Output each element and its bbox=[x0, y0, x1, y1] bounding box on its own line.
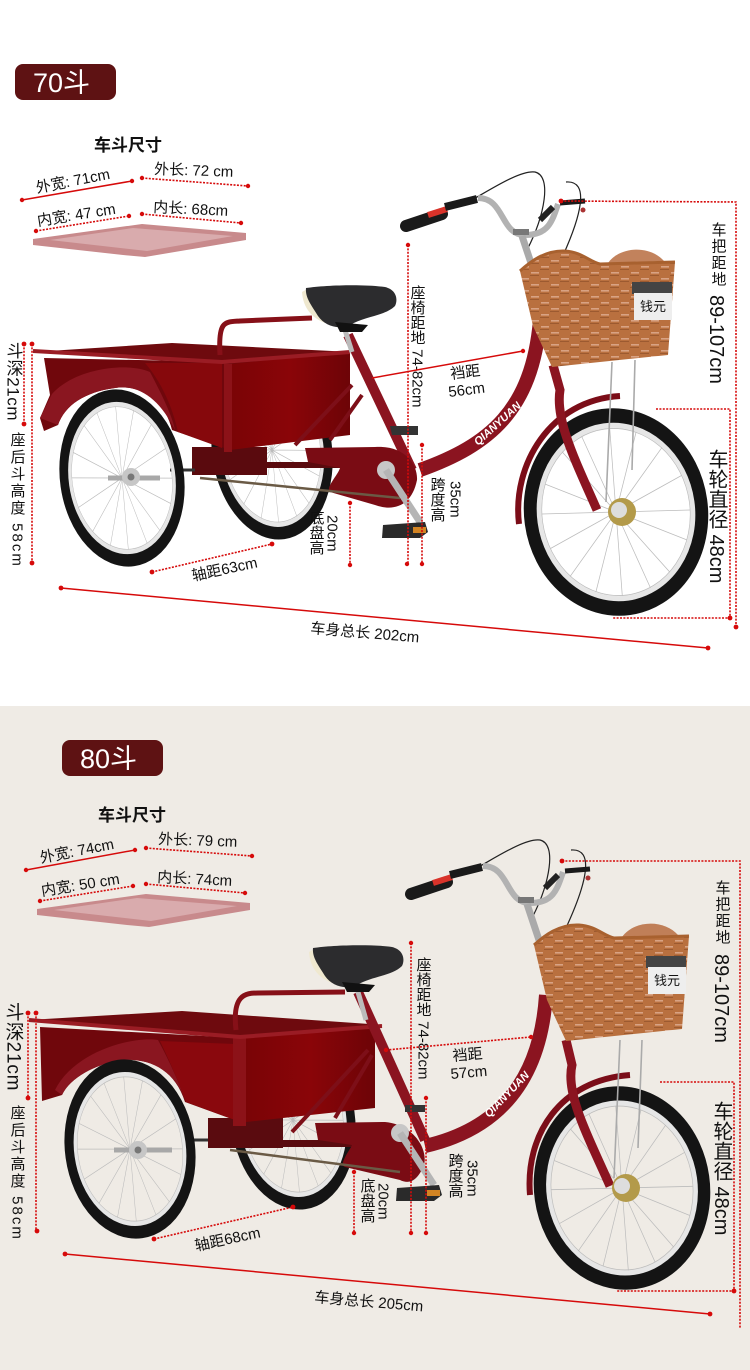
dimension: bed depth 21cm: 斗深21cm bbox=[4, 342, 23, 421]
dimension: step-over height 35cm: 35cm bbox=[446, 481, 464, 518]
dimension: handlebar height 89-107cm: 车把距地 bbox=[714, 880, 730, 946]
cargo tray diagram bbox=[37, 894, 250, 927]
dimension: seat height 74-82cm bbox=[405, 243, 426, 566]
dimension: wheel diameter 48cm bbox=[612, 409, 732, 620]
dimension: overall length 202cm bbox=[59, 586, 710, 650]
dimension: rear bed height 58cm bbox=[8, 1011, 39, 1241]
dimension: handlebar height 89-107cm bbox=[559, 199, 738, 629]
dimension: inner width 50cm: 内宽: 50 cm bbox=[40, 871, 121, 900]
frame: 70斗 bbox=[200, 320, 540, 508]
dimension: rear bed height 58cm: 座后斗高度 58cm bbox=[8, 432, 26, 568]
dimension: wheelbase 63cm: 轴距63cm bbox=[190, 554, 259, 585]
dimension: outer length 79cm bbox=[144, 831, 254, 858]
dimension: overall length 205cm bbox=[63, 1252, 712, 1316]
saddle: 70斗 bbox=[302, 285, 396, 332]
dimension: inner length 68cm bbox=[140, 199, 243, 225]
dimension: chassis height 20cm: 20cm bbox=[324, 515, 340, 552]
dimension: outer width 71cm bbox=[20, 166, 134, 202]
dimension: inner width 47cm: 内宽: 47 cm bbox=[36, 201, 117, 230]
dimension: chassis height 20cm: 底盘高 bbox=[308, 510, 324, 555]
white background panel: 70斗 bbox=[0, 0, 750, 706]
dimension: handlebar height 89-107cm: 车把距地 bbox=[710, 222, 726, 288]
front fender and wheel: 80斗 bbox=[528, 1040, 716, 1293]
80斗 badge bbox=[62, 740, 163, 776]
dimension: wheel diameter 48cm: 车轮直径 48cm bbox=[710, 1101, 733, 1235]
cargo box: 70斗 bbox=[33, 318, 352, 475]
dimension: crotch distance 57cm: 57cm bbox=[450, 1063, 488, 1083]
dimension: step-over height 35cm: 跨度高 bbox=[446, 1153, 464, 1198]
80斗 badge: 80斗 bbox=[80, 744, 137, 774]
dimension: inner length 74cm bbox=[144, 869, 247, 895]
70斗 badge bbox=[15, 64, 116, 100]
front fender and wheel: 70斗 bbox=[518, 360, 714, 620]
dimension: handlebar height 89-107cm: 89-107cm bbox=[710, 954, 732, 1043]
dimension: handlebar height 89-107cm: 89-107cm bbox=[705, 295, 727, 384]
dimension: chassis height 20cm: 20cm bbox=[374, 1183, 392, 1220]
dimension: seat height 74-82cm: 座椅距地 74-82cm bbox=[414, 957, 432, 1080]
dimension: crotch distance 56cm bbox=[372, 349, 525, 401]
dimension: step-over height 35cm: 跨度高 bbox=[428, 477, 446, 522]
basket: 70斗 bbox=[520, 250, 675, 367]
dimension: inner length 74cm: 内长: 74cm bbox=[157, 869, 233, 890]
dimension: step-over height 35cm: 35cm bbox=[464, 1160, 480, 1197]
dimension: chassis height 20cm bbox=[308, 501, 352, 567]
dimension: crotch distance 57cm: 裆距 bbox=[452, 1045, 483, 1065]
heading: 车斗尺寸: 车斗尺寸 bbox=[98, 805, 166, 825]
dimension: outer width 74cm bbox=[24, 836, 137, 872]
crank and pedal: 70斗 bbox=[377, 461, 428, 538]
dimension: crotch distance 56cm: 裆距 bbox=[449, 362, 481, 383]
dimension: bed depth 21cm bbox=[2, 1002, 30, 1100]
dimension: crotch distance 56cm: 56cm bbox=[447, 380, 486, 401]
basket: 80斗 bbox=[534, 924, 689, 1041]
rear wheel front: 80斗 bbox=[58, 1058, 208, 1240]
dimension: rear bed height 58cm: 座后斗高度 58cm bbox=[8, 1105, 26, 1241]
dimension: rear bed height 58cm bbox=[8, 342, 34, 568]
heading: 车斗尺寸: 车斗尺寸 bbox=[94, 135, 162, 155]
rear wheel front: 70斗 bbox=[53, 388, 195, 568]
dimension: handlebar height 89-107cm bbox=[560, 859, 740, 1328]
dimension: crotch distance 57cm bbox=[384, 1035, 533, 1083]
dimension: wheel diameter 48cm bbox=[616, 1082, 736, 1293]
dimension: wheelbase 68cm: 轴距68cm bbox=[193, 1224, 262, 1255]
dimension: bed depth 21cm: 斗深21cm bbox=[2, 1002, 24, 1091]
crank and pedal: 80斗 bbox=[391, 1124, 442, 1201]
dimension: seat height 74-82cm: 座椅距地 74-82cm bbox=[408, 285, 426, 408]
dimension: inner length 68cm: 内长: 68cm bbox=[153, 199, 229, 220]
dimension: overall length 205cm: 车身总长 205cm bbox=[314, 1289, 424, 1316]
70斗 badge: 70斗 bbox=[33, 68, 90, 98]
dimension: overall length 202cm: 车身总长 202cm bbox=[310, 620, 420, 647]
brand on frame: 70斗: QIANYUAN bbox=[472, 399, 524, 448]
frame: 80斗 bbox=[230, 985, 546, 1182]
cargo box: 80斗 bbox=[28, 992, 383, 1148]
cargo tray diagram bbox=[33, 224, 246, 257]
beige background panel: 80斗 bbox=[0, 706, 750, 1370]
dimension: chassis height 20cm bbox=[352, 1170, 392, 1235]
rear wheel behind: 70斗 bbox=[205, 359, 339, 541]
dimension: outer width 71cm: 外宽: 71cm bbox=[35, 166, 111, 197]
saddle: 80斗 bbox=[309, 945, 403, 992]
brand on frame: 80斗: QIANYUAN bbox=[483, 1069, 533, 1120]
dimension: wheelbase 63cm bbox=[150, 542, 274, 585]
dimension: wheel diameter 48cm: 车轮直径 48cm bbox=[705, 449, 728, 583]
dimension: wheelbase 68cm bbox=[152, 1205, 295, 1255]
dimension: chassis height 20cm: 底盘高 bbox=[358, 1178, 376, 1223]
dimension: outer width 74cm: 外宽: 74cm bbox=[39, 836, 115, 867]
rear wheel behind: 80斗 bbox=[224, 1029, 362, 1211]
handlebar: 70斗 bbox=[406, 172, 586, 272]
dimension: outer length 72cm bbox=[140, 161, 250, 188]
handlebar: 80斗 bbox=[411, 840, 590, 940]
dimension: step-over height 35cm bbox=[420, 443, 464, 566]
dimension: outer length 79cm: 外长: 79 cm bbox=[158, 831, 238, 851]
dimension: step-over height 35cm bbox=[424, 1096, 480, 1235]
dimension: seat height 74-82cm bbox=[409, 941, 432, 1235]
dimension: outer length 72cm: 外长: 72 cm bbox=[154, 161, 234, 181]
